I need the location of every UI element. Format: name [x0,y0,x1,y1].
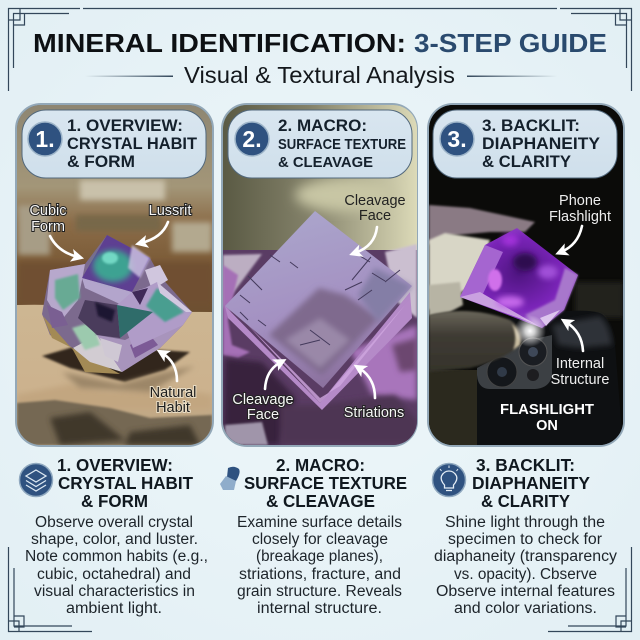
crystal cluster [42,235,192,374]
heading: 1. OVERVIEW: [57,455,173,475]
body text: vs. opacity). Cbserve [454,566,597,583]
header: step 3 [433,110,617,178]
body text: grain structure. Reveals [237,583,402,600]
column: overview description [20,455,208,617]
label: natural habit: Habit [156,400,190,416]
label: phone flashlight [549,193,611,225]
label: cubic form: Form [31,219,65,235]
body text: cubic, octahedral) and [37,566,191,583]
heading [472,455,590,511]
body text: specimen to check for [448,531,602,548]
heading [57,455,193,511]
column: backlit description [432,455,617,617]
label: cleavage face top: Cleavage [344,193,406,209]
arrow: cubic form [50,236,78,257]
heading: SURFACE TEXTURE [244,473,407,493]
title [33,28,607,58]
label: phone flashlight: Flashlight [549,209,611,225]
heading: CRYSTAL HABIT [58,473,193,493]
label: internal structure [551,356,609,388]
body text: Note common habits (e.g., [25,548,208,565]
header: step 1: & FORM [67,153,135,171]
heading: 3. BACKLIT: [476,455,575,475]
icon: light bulb [432,464,466,496]
number badge 3 [440,122,474,156]
arrow: internal structure [566,322,583,351]
label: phone flashlight: Phone [559,193,601,209]
arrow: cleavage face top [355,227,377,253]
body text: closely for cleavage [252,531,388,548]
body text: shape, color, and luster. [31,531,198,548]
label: cleavage face top [344,193,406,224]
header: step 2: & CLEAVAGE [278,154,373,171]
label: internal structure: Structure [551,372,609,388]
panel: step 1 overview [16,104,213,446]
number badge 1: 1. [35,126,55,152]
body text [237,514,402,617]
header: step 2 [228,110,412,178]
photo: cleavage surface [223,105,417,445]
heading: & FORM [81,491,148,511]
header: step 3: & CLARITY [482,153,571,171]
photo: fluorite on rock [17,105,213,445]
arrow: striations [359,368,375,398]
label: flashlight on: ON [536,418,558,434]
camera lenses [487,338,547,387]
column: macro description [220,455,407,617]
panel: step 2 macro [222,104,417,446]
label: natural habit [150,385,196,416]
number badge 3: 3. [447,126,467,152]
body text: Observe internal features [436,583,615,600]
fluorite cube [225,211,412,410]
label: cleavage face top: Face [359,208,391,224]
label: cubic form: Cubic [29,203,67,219]
arrow: cleavage face bottom [265,362,281,389]
icon: mineral fragment [220,467,240,490]
label: flashlight on: FLASHLIGHT [500,402,594,418]
subtitle: Visual & Textural Analysis [184,62,455,88]
number badge 2: 2. [242,126,262,152]
heading: 2. MACRO: [276,455,365,475]
amethyst crystal [460,228,578,328]
label: cleavage face bottom: Face [247,407,279,423]
header: step 1: CRYSTAL HABIT [67,135,197,153]
body text: and color variations. [454,600,597,617]
body text: internal structure. [257,600,382,617]
body text: Observe overall crystal [35,514,193,531]
label: cleavage face bottom [232,392,294,423]
header: step 3: DIAPHANEITY [482,135,600,153]
body text: striations, fracture, and [239,566,401,583]
body text: diaphaneity (transparency [434,548,617,565]
body text [25,514,208,617]
header: step 2: 2. MACRO: [278,117,367,135]
body text: visual characteristics in [34,583,195,600]
photo: backlit crystal on phone [429,105,623,445]
header: step 3: 3. BACKLIT: [482,117,580,135]
header: step 1: 1. OVERVIEW: [67,117,183,135]
label: flashlight on [500,402,594,434]
finger [429,311,522,372]
heading: & CLEAVAGE [266,491,375,511]
arrow: lussrit [141,222,168,243]
label: lussrit: Lussrit [149,203,191,219]
label: internal structure: Internal [556,356,604,372]
title: 3-STEP GUIDE [414,28,607,58]
body text: ambient light. [66,600,162,617]
heading [244,455,407,511]
header: step 1 [22,110,206,178]
label: cleavage face bottom: Cleavage [232,392,294,408]
body text: (breakage planes), [256,548,383,565]
icon: stacked layers [20,464,52,496]
number badge 1 [28,122,62,156]
label: natural habit: Natural [150,385,196,401]
title: MINERAL IDENTIFICATION: [33,28,406,58]
header: step 2: SURFACE TEXTURE [278,136,406,153]
heading: DIAPHANEITY [472,473,590,493]
label: striations: Striations [344,405,404,421]
heading: & CLARITY [481,491,570,511]
panel: step 3 backlit [428,104,624,446]
arrow: natural habit [162,353,177,381]
body text: Shine light through the [445,514,605,531]
label: cubic form [29,203,67,235]
number badge 2 [235,122,269,156]
body text: Examine surface details [237,514,402,531]
flashlight glow [514,315,546,347]
body text [434,514,617,617]
arrow: phone flashlight [561,226,582,252]
